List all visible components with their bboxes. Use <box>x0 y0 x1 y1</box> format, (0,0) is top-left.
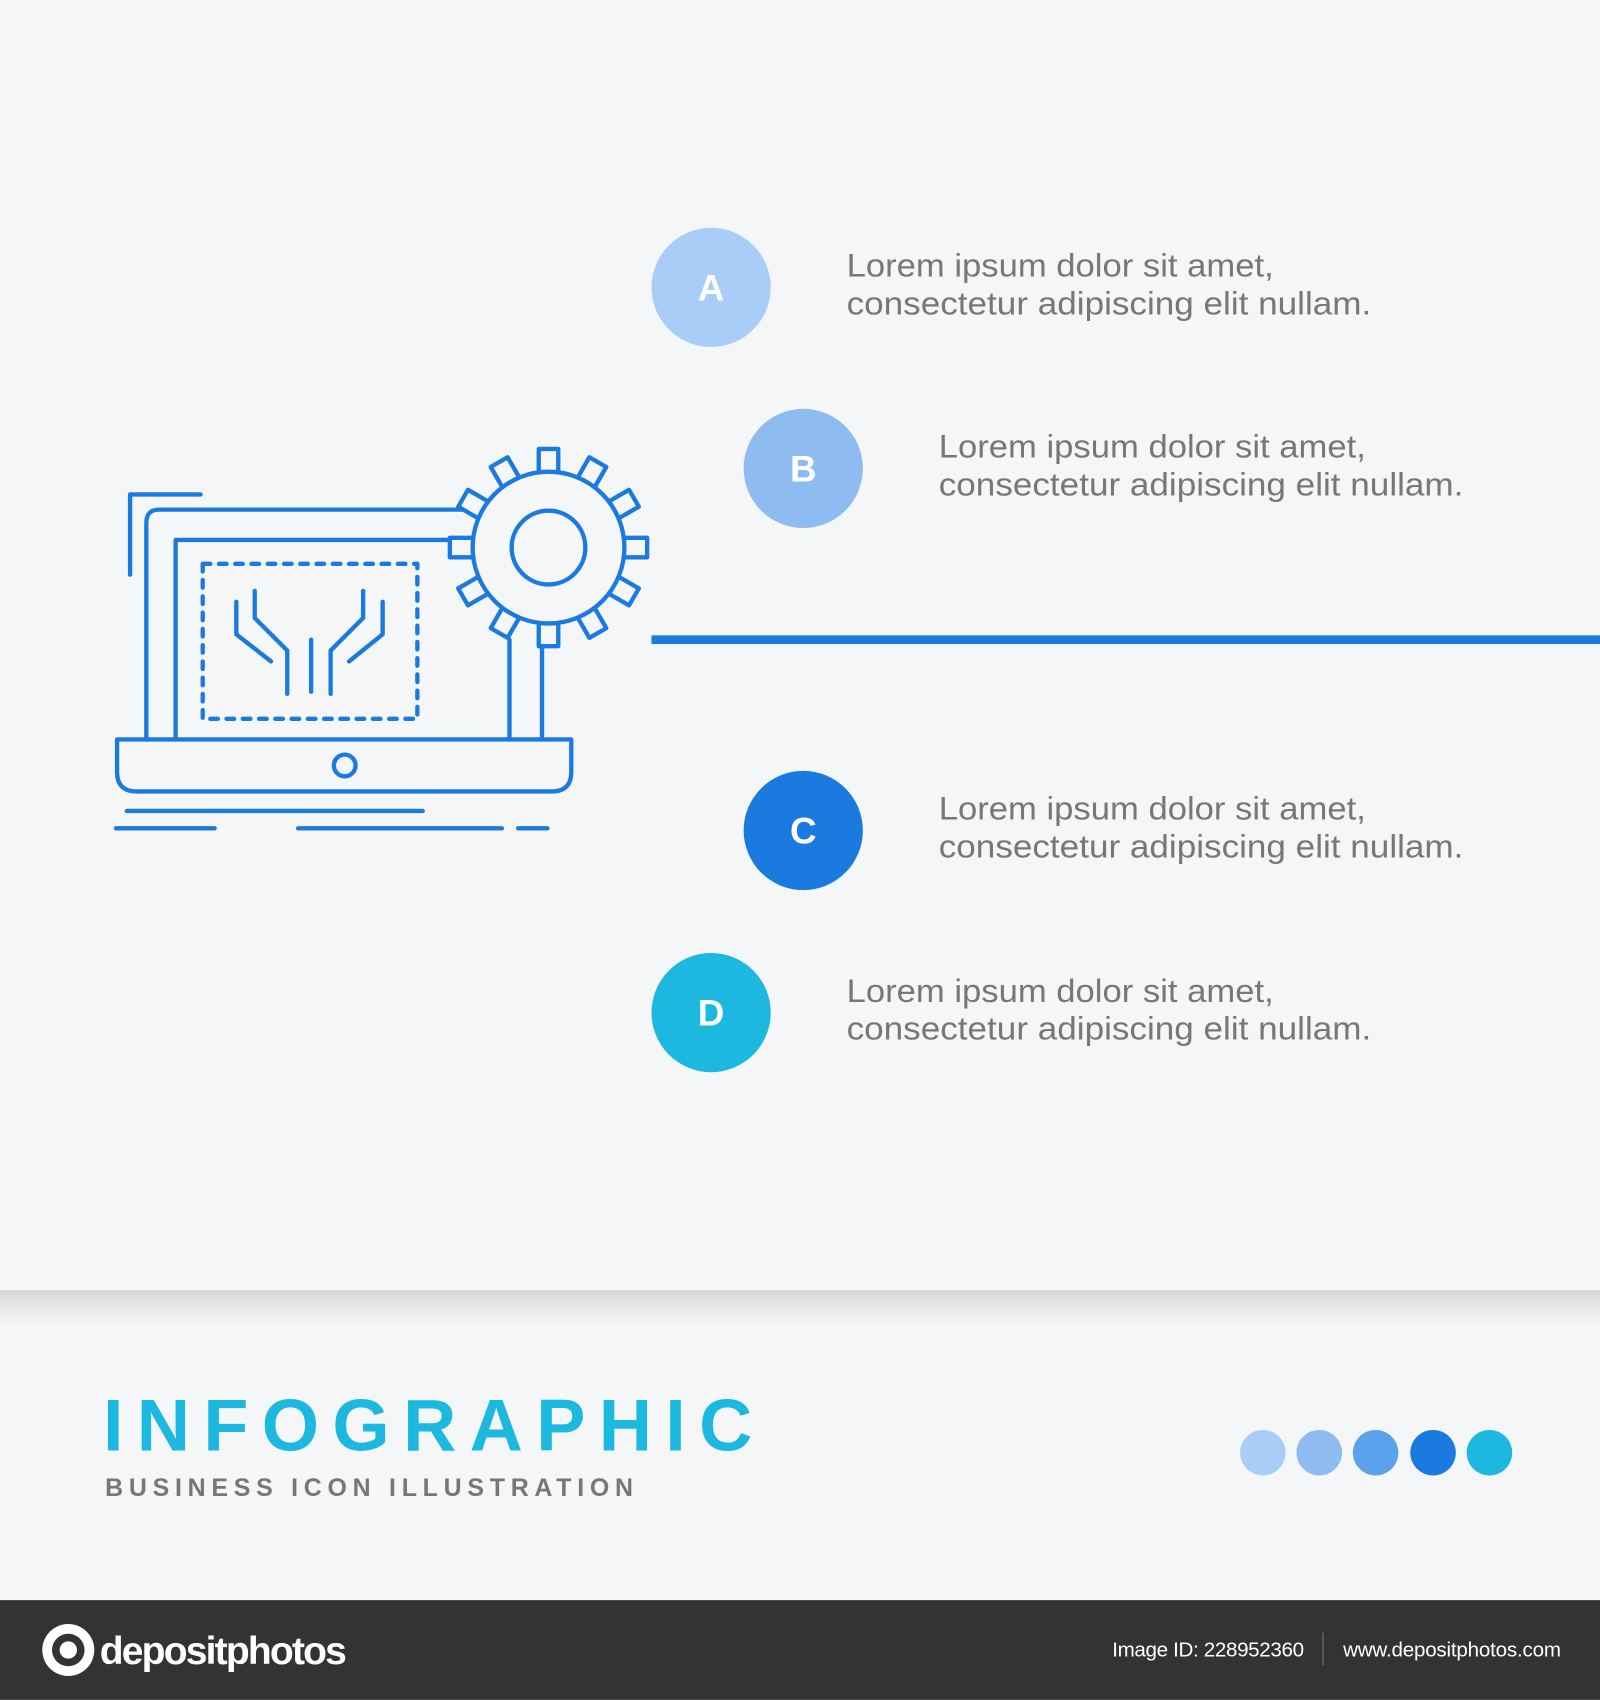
color dots <box>1240 1430 1512 1475</box>
item D: D <box>698 993 724 1034</box>
title: INFOGRAPHIC <box>103 1384 767 1467</box>
footer bar: www.depositphotos.com <box>1342 1639 1561 1662</box>
item C: Lorem ipsum dolor sit amet, <box>939 791 1366 827</box>
item A: Lorem ipsum dolor sit amet, <box>847 248 1274 284</box>
item B: Lorem ipsum dolor sit amet, <box>939 429 1366 465</box>
subtitle: BUSINESS ICON ILLUSTRATION <box>105 1474 637 1502</box>
item A <box>651 228 1371 347</box>
item B <box>744 409 1463 528</box>
timeline line <box>651 635 1600 644</box>
item D <box>651 953 1371 1072</box>
item C: consectetur adipiscing elit nullam. <box>939 829 1463 865</box>
item B: consectetur adipiscing elit nullam. <box>939 467 1463 503</box>
footer bar: depositphotos <box>100 1630 347 1673</box>
item A: consectetur adipiscing elit nullam. <box>847 285 1371 321</box>
icon: laptop with gear <box>116 449 647 828</box>
item C <box>744 771 1463 890</box>
item A: A <box>698 267 724 308</box>
footer bar <box>0 1600 1600 1700</box>
item D: Lorem ipsum dolor sit amet, <box>847 973 1274 1009</box>
item D: consectetur adipiscing elit nullam. <box>847 1011 1371 1047</box>
item C: C <box>790 810 817 851</box>
item B: B <box>790 448 817 489</box>
footer bar: Image ID: 228952360 <box>1112 1639 1304 1662</box>
